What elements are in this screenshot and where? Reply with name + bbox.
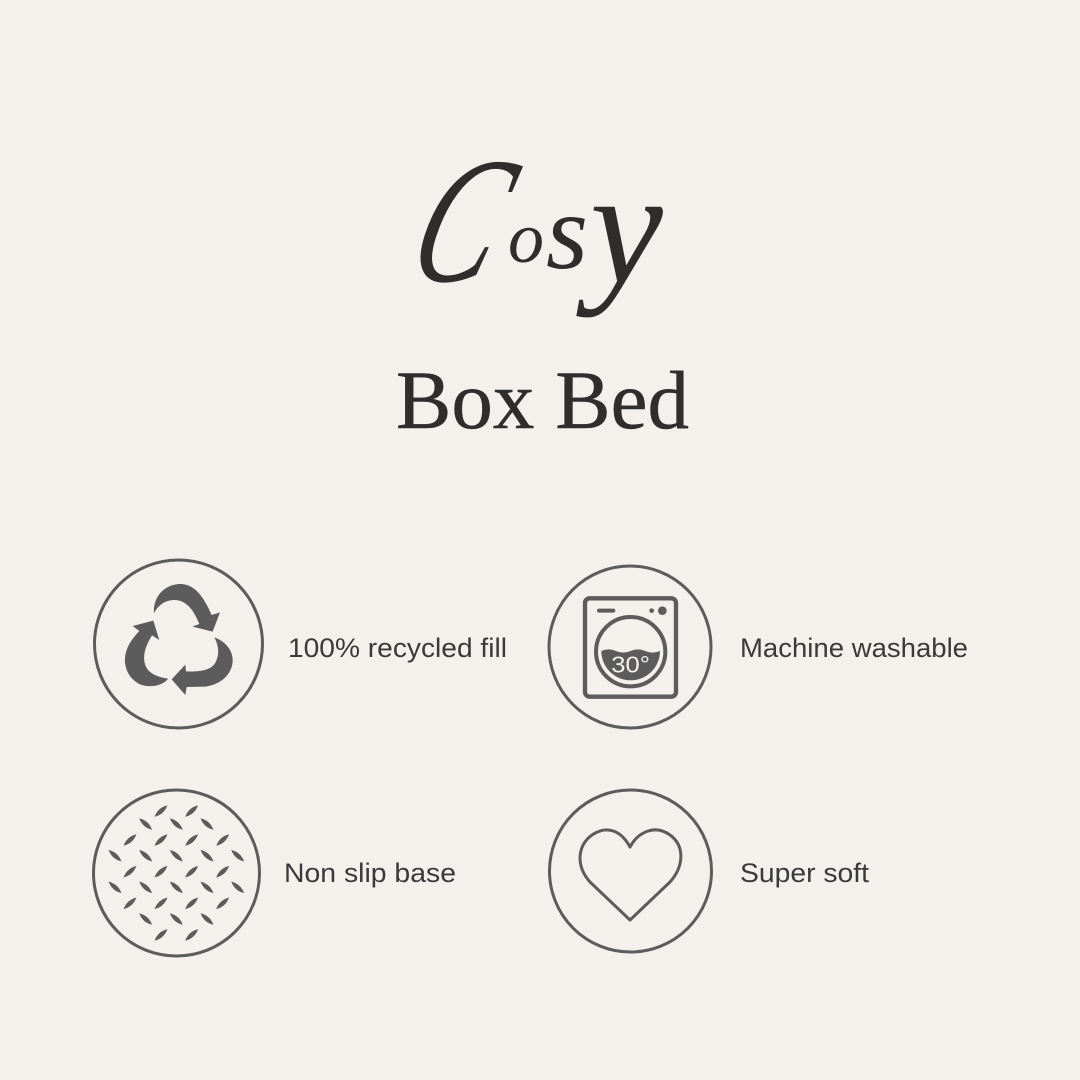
title: Cosy script wordmark (390, 122, 663, 321)
feature: non slip base (94, 790, 456, 956)
label: Super soft: Super soft (740, 858, 870, 888)
feature: 100% recycled fill (94, 560, 507, 728)
title: Cosy script wordmark: s (546, 173, 588, 292)
icon: recycle arrows in circle (94, 560, 262, 728)
icon: non slip tread pattern in circle (94, 790, 260, 956)
icon: washing machine 30 degrees in circle: 30° (611, 651, 650, 677)
icon: heart in circle (550, 790, 712, 952)
label: Non slip base: Non slip base (284, 858, 456, 888)
icon: washing machine 30 degrees in circle (549, 566, 711, 728)
title: Cosy script wordmark: C (390, 122, 538, 321)
title: Cosy script wordmark: o (508, 198, 544, 278)
label: 100% recycled fill: 100% recycled fill (288, 633, 507, 663)
title: Cosy script wordmark: y (576, 137, 663, 318)
feature: machine washable (549, 566, 968, 728)
heading: Box Bed: Box Bed (396, 354, 689, 446)
feature: super soft (550, 790, 870, 952)
label: Machine washable: Machine washable (740, 633, 968, 663)
